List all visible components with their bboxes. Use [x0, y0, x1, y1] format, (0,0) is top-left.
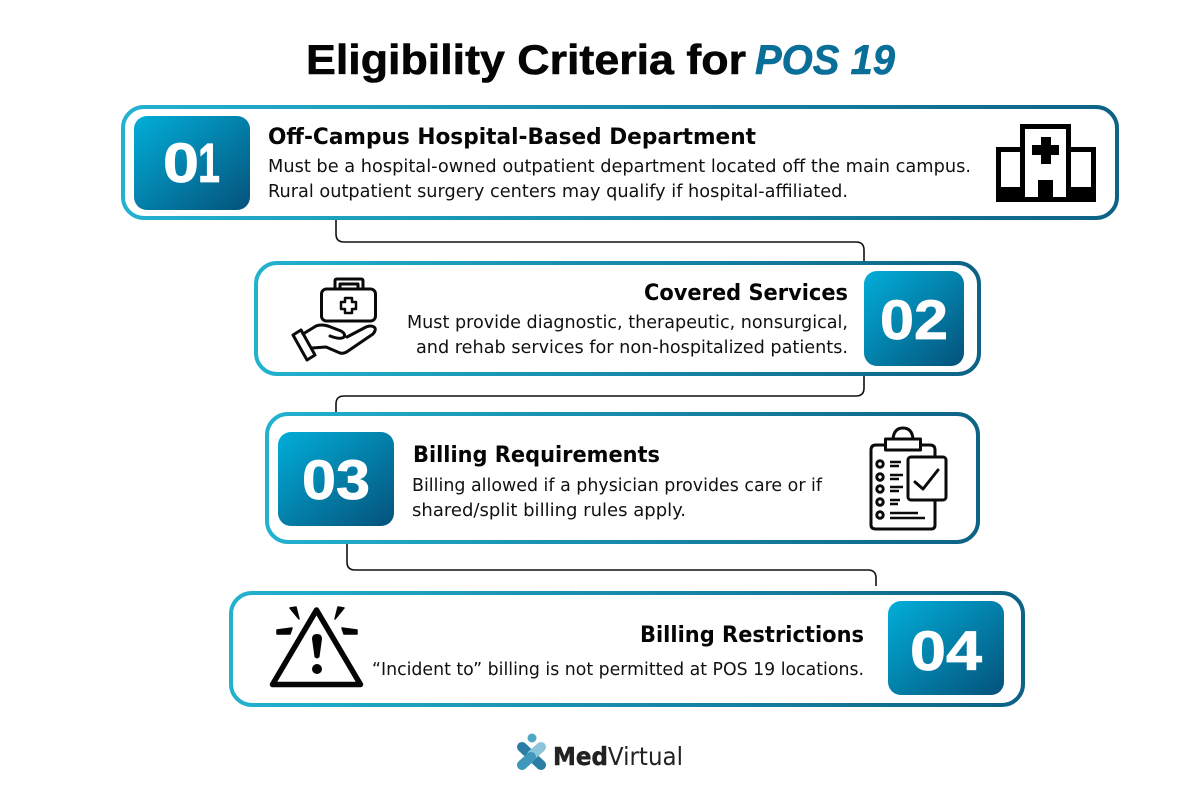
connector: step 1 to step 2 [336, 220, 864, 262]
text: covered services description: Must provide diagnostic, therapeutic, nonsurgical, [407, 313, 848, 333]
text: billing restrictions description: “Incident to” billing is not permitted at POS 19 locations. [372, 660, 864, 680]
text: off-campus description: Must be a hospital-owned outpatient department located off the main campus. [268, 157, 971, 177]
badge 01: 1 [198, 131, 220, 194]
title [306, 36, 895, 83]
text: billing requirements description: Billing allowed if a physician provides care or if [412, 476, 823, 496]
title: POS 19 [755, 36, 895, 83]
heading: billing restrictions: Billing Restrictions [640, 623, 864, 648]
heading: covered services: Covered Services [644, 281, 848, 306]
text: covered services description [407, 313, 848, 358]
badge 01: 0 [163, 131, 199, 194]
logo: MedVirtual [522, 734, 683, 771]
panel: step 4 billing restrictions [231, 593, 1023, 705]
text: off-campus description: Rural outpatient surgery centers may qualify if hospital-affiliated. [268, 182, 848, 202]
badge 03: 03 [302, 448, 370, 511]
panel: step 3 billing requirements [267, 414, 978, 542]
icon: hand holding medical kit [293, 279, 376, 360]
icon: clipboard with checklist [871, 428, 946, 529]
panel: step 2 covered services [256, 263, 979, 374]
text: covered services description: and rehab services for non-hospitalized patients. [416, 338, 848, 358]
connector: step 3 to step 4 [347, 543, 876, 586]
icon: hospital [996, 124, 1096, 202]
badge 02: 02 [880, 288, 948, 351]
heading: billing requirements: Billing Requirements [413, 443, 660, 468]
badge 03 [278, 432, 394, 526]
text: billing requirements description: shared/split billing rules apply. [412, 501, 686, 521]
panel: step 1 off-campus department [123, 107, 1117, 218]
icon: logo cross [522, 734, 541, 765]
badge 02 [864, 271, 964, 366]
heading: off-campus department: Off-Campus Hospital-Based Department [268, 125, 756, 150]
logo: MedVirtual: MedVirtual [553, 742, 683, 771]
title: Eligibility Criteria for [306, 36, 746, 83]
badge 01 [134, 116, 250, 210]
text: billing requirements description [412, 476, 823, 521]
icon: warning triangle [272, 607, 360, 684]
badge 04: 04 [910, 619, 982, 682]
text: off-campus description [268, 157, 971, 202]
connector: step 2 to step 3 [336, 375, 864, 413]
badge 04 [888, 601, 1004, 695]
